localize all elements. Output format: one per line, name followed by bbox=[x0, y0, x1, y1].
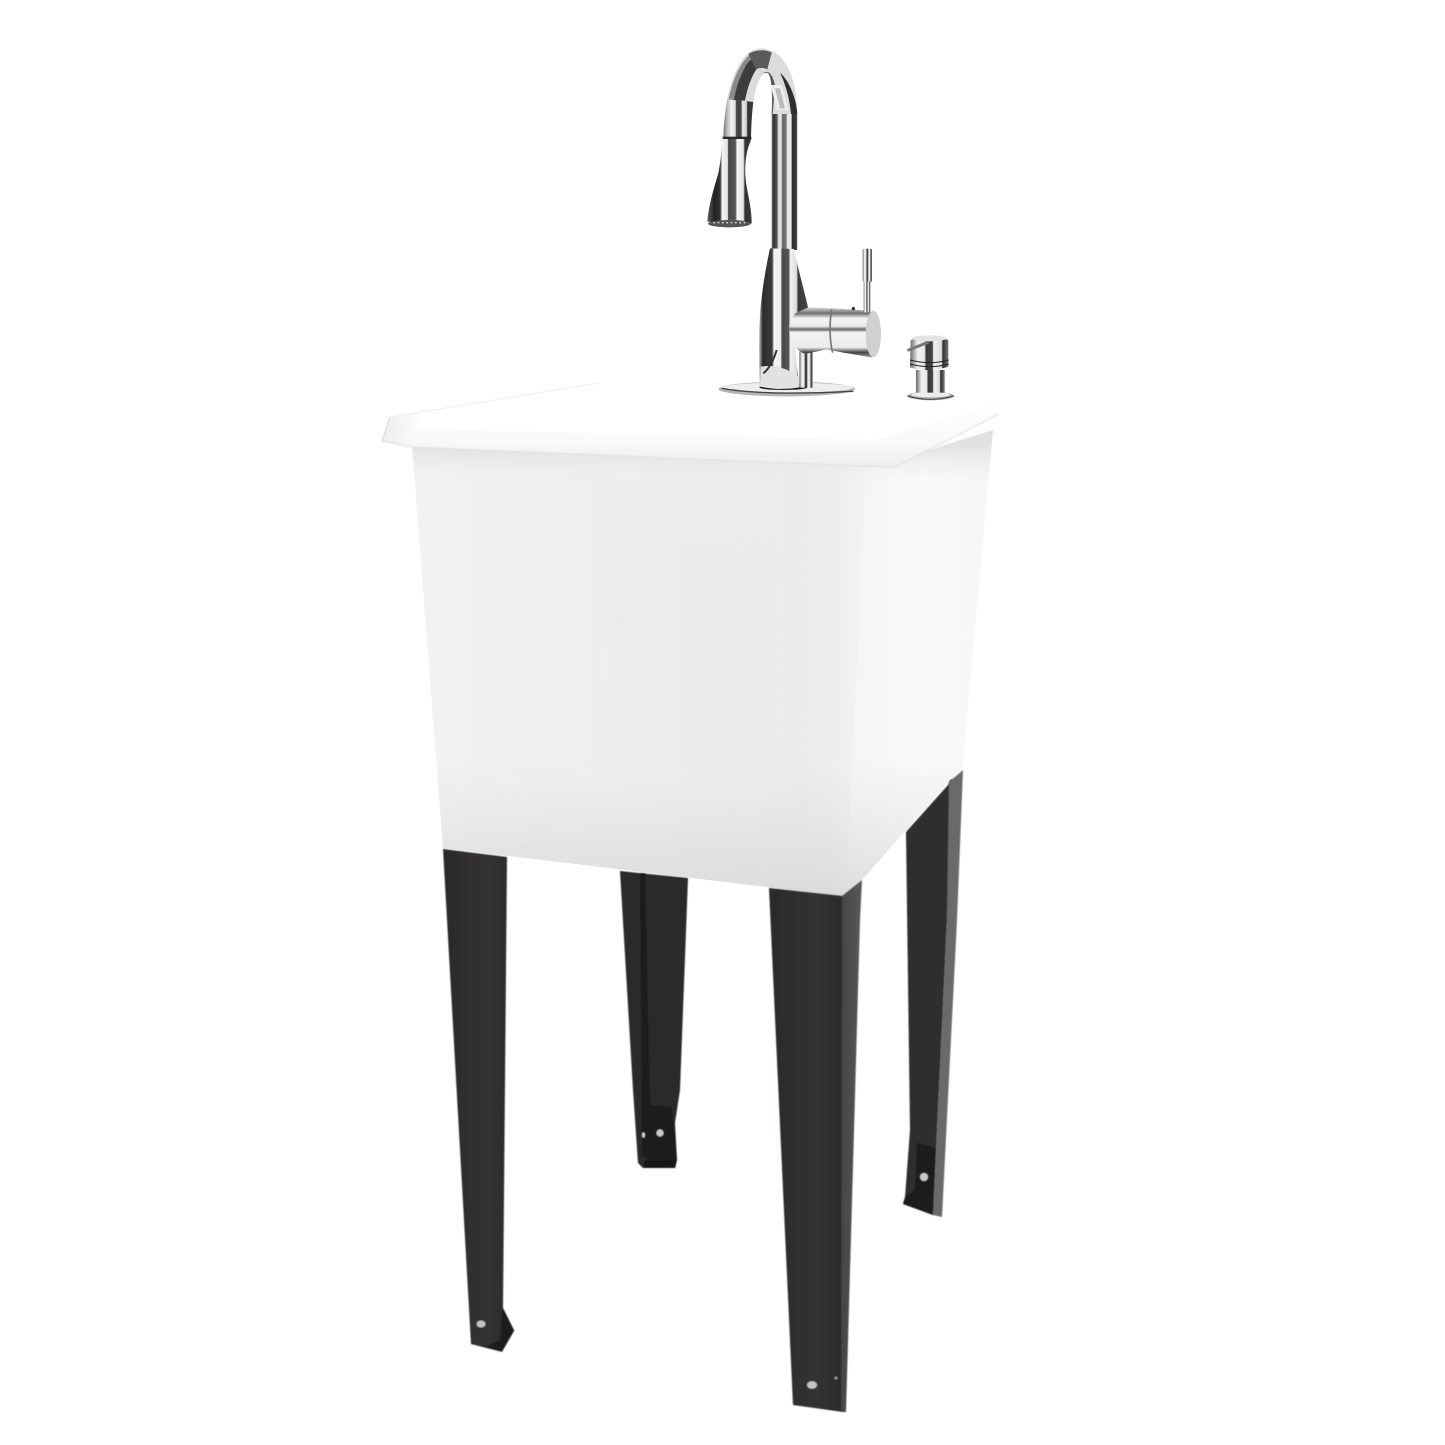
pull-down spray head bbox=[707, 137, 752, 227]
leg: front right bbox=[769, 880, 862, 1412]
faucet bbox=[707, 48, 954, 400]
leg: front left bbox=[443, 849, 514, 1352]
leg: back center bbox=[620, 871, 688, 1168]
front legs bbox=[443, 849, 862, 1412]
leg: back right bbox=[903, 770, 963, 1217]
gooseneck spout bbox=[723, 48, 797, 250]
faucet body bbox=[759, 248, 808, 389]
mixer handle body bbox=[789, 307, 881, 357]
tub bbox=[382, 383, 1003, 896]
soap dispenser bbox=[907, 335, 954, 400]
deck plate bbox=[718, 382, 855, 396]
rear legs bbox=[620, 770, 963, 1217]
tub body bbox=[412, 430, 993, 896]
base pipe bbox=[799, 352, 813, 388]
tub rim bbox=[382, 383, 1003, 467]
lever bbox=[863, 249, 872, 312]
